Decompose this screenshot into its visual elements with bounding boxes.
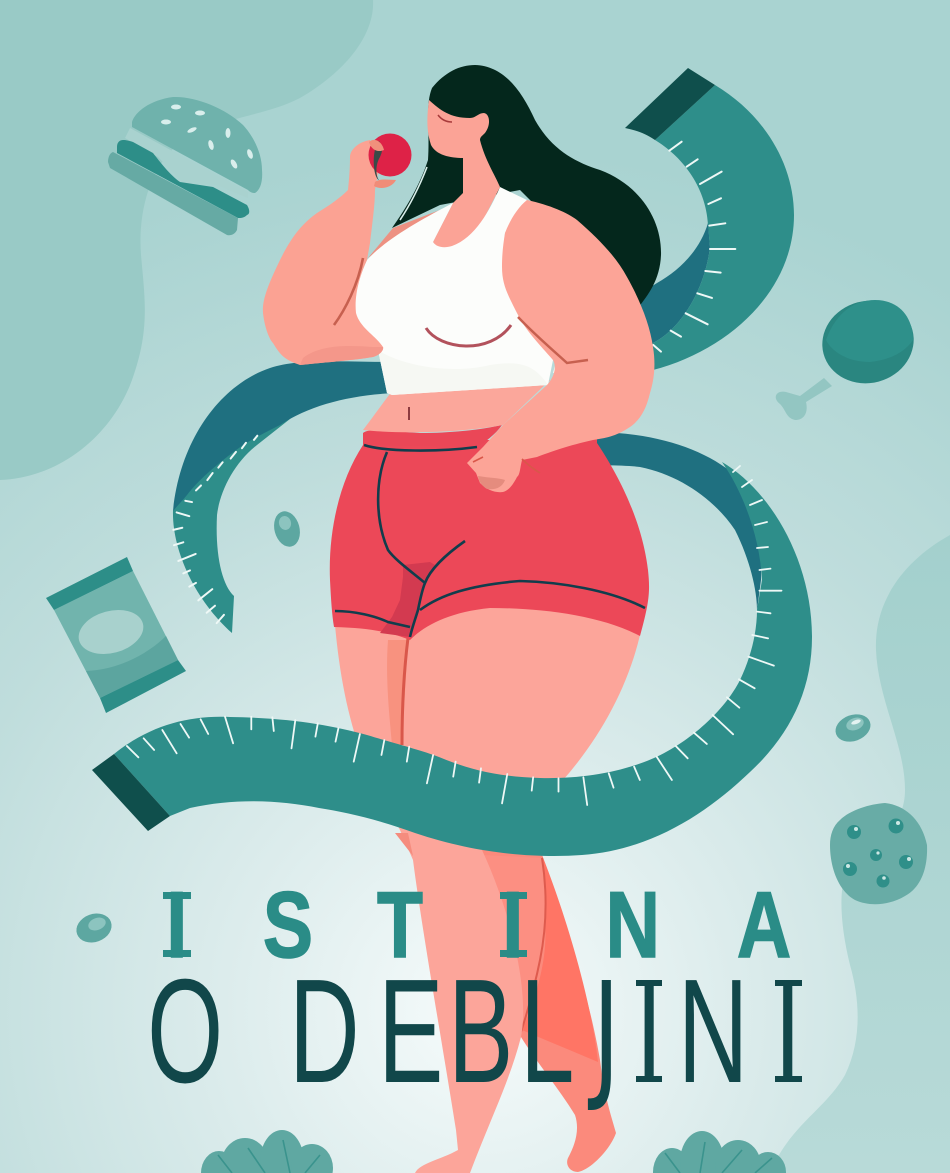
front leg bbox=[335, 600, 640, 1173]
knee fold bbox=[395, 833, 413, 856]
title: ISTINA: N bbox=[606, 873, 660, 978]
thigh line bbox=[402, 638, 408, 745]
icon: snack bag bbox=[46, 557, 186, 713]
title: ISTINA: T bbox=[377, 873, 423, 978]
measuring tape: lower front band bbox=[92, 462, 812, 856]
title: ISTINA: A bbox=[737, 873, 791, 978]
icon: seed bottom left bbox=[72, 909, 116, 947]
icon: seed left bbox=[270, 508, 304, 550]
woman bbox=[263, 65, 661, 1173]
thigh fold bbox=[387, 640, 408, 745]
title: ISTINA: S bbox=[263, 873, 313, 978]
icon: burger bbox=[108, 97, 262, 235]
face and neck bbox=[427, 100, 500, 255]
icon: seed right bbox=[832, 710, 874, 746]
apple bbox=[368, 134, 412, 188]
navel bbox=[408, 407, 410, 420]
arm line bbox=[334, 258, 363, 325]
hair bbox=[392, 65, 661, 308]
white top bbox=[355, 187, 553, 395]
elbow shade bbox=[300, 346, 383, 365]
side gap bbox=[553, 358, 567, 373]
measuring tape: left arc bbox=[173, 361, 395, 633]
title: ISTINA: I bbox=[502, 873, 523, 978]
chest shadow bbox=[368, 208, 445, 258]
left arm bbox=[263, 140, 383, 365]
belly bbox=[363, 380, 550, 432]
measuring tape: upper right back bbox=[625, 68, 794, 370]
back leg bbox=[480, 850, 616, 1172]
title: ISTINA bbox=[163, 873, 791, 978]
top line bbox=[426, 325, 511, 346]
eyebrow bbox=[438, 115, 452, 122]
shorts bbox=[330, 425, 649, 640]
top shading bbox=[378, 350, 548, 395]
leaves: bottom left bbox=[201, 1130, 333, 1173]
blob: top left bbox=[0, 0, 373, 480]
title: O DEBLJINI: O DEBLJINI bbox=[147, 947, 801, 1115]
hair highlight bbox=[400, 167, 427, 220]
title: ISTINA: I bbox=[166, 873, 187, 978]
measuring tape: right back band bbox=[570, 432, 761, 610]
arm fold line bbox=[518, 317, 588, 363]
icon: chicken drumstick bbox=[776, 290, 923, 420]
leaves: bottom right bbox=[653, 1131, 786, 1173]
hand shade bbox=[478, 476, 505, 489]
right arm bbox=[467, 200, 654, 492]
blob: right bbox=[770, 535, 950, 1173]
finger lines bbox=[473, 457, 540, 473]
icon: cookie bbox=[830, 803, 927, 904]
